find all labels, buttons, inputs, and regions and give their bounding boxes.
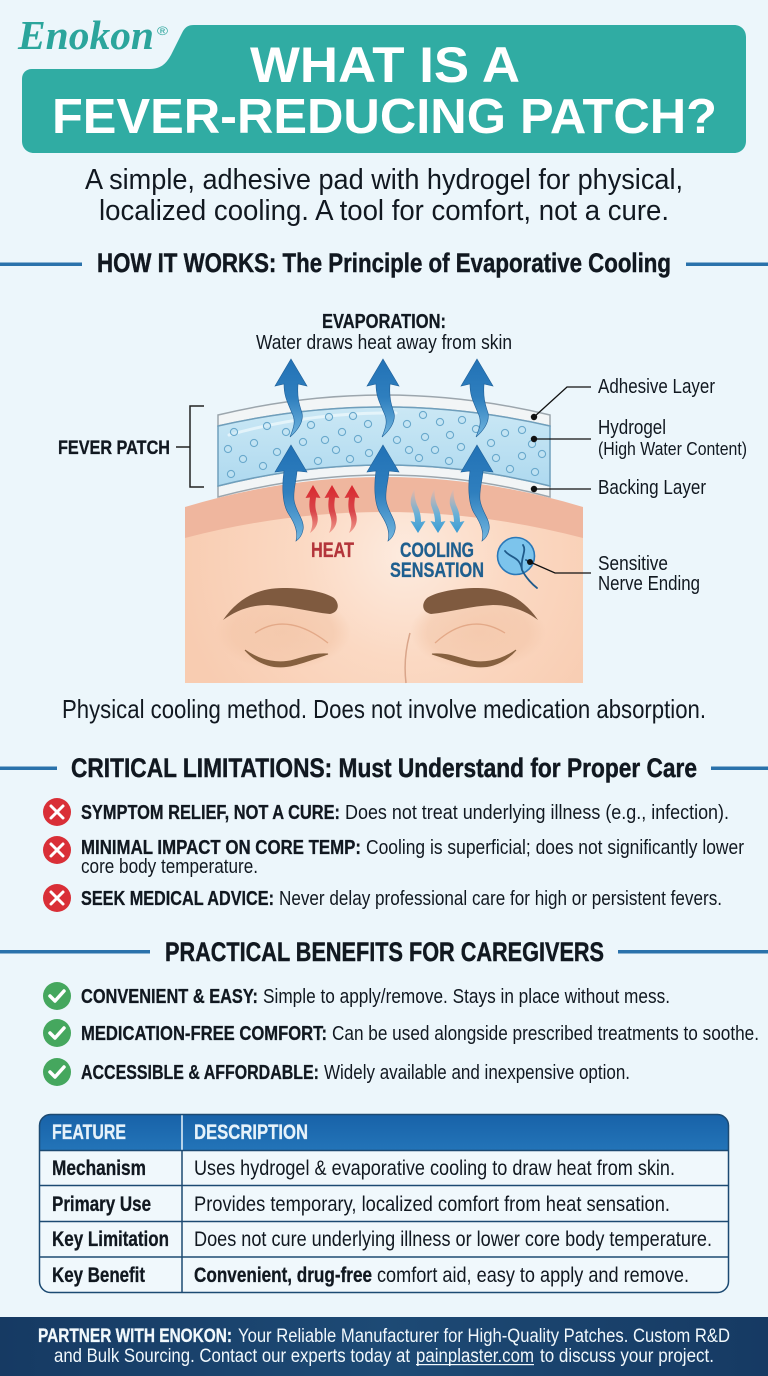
evaporation caption xyxy=(256,310,512,354)
benefits list xyxy=(43,982,759,1086)
row: mechanism: Uses hydrogel & evaporative cooling to draw heat from skin. xyxy=(194,1157,675,1180)
footer call to action: and Bulk Sourcing. Contact our experts today at xyxy=(54,1346,411,1367)
row: primary use: Primary Use xyxy=(52,1193,151,1216)
diagram: patch on forehead xyxy=(185,359,583,683)
row: mechanism: Mechanism xyxy=(52,1157,146,1180)
label: cooling sensation: SENSATION xyxy=(390,559,484,582)
arrows: heat drawn from skin xyxy=(275,445,493,541)
limitation 2: core body temperature. xyxy=(81,856,258,878)
intro text: A simple, adhesive pad with hydrogel for physical, xyxy=(85,164,683,196)
benefit 1: Simple to apply/remove. Stays in place without mess. xyxy=(263,986,670,1008)
row: key limitation: Key Limitation xyxy=(52,1228,169,1251)
icon: nerve ending xyxy=(498,538,537,588)
arrows: evaporation rising from patch xyxy=(275,359,493,437)
row: mechanism xyxy=(52,1157,675,1180)
callout: adhesive layer xyxy=(531,376,715,420)
limitation 1: SYMPTOM RELIEF, NOT A CURE: xyxy=(81,802,340,824)
row: key benefit: Convenient, drug-free xyxy=(194,1264,372,1287)
footer call to action: PARTNER WITH ENOKON: xyxy=(38,1326,232,1347)
benefit 3: Widely available and inexpensive option. xyxy=(324,1062,630,1084)
benefit 1 xyxy=(43,982,670,1010)
limitation 2: MINIMAL IMPACT ON CORE TEMP: xyxy=(81,837,361,859)
label: cooling sensation: COOLING xyxy=(400,539,474,562)
evaporation caption: Water draws heat away from skin xyxy=(256,331,512,354)
title banner: FEVER-REDUCING PATCH? xyxy=(52,90,717,144)
benefit 1: CONVENIENT & EASY: xyxy=(81,986,258,1008)
limitation 1 xyxy=(43,798,729,826)
footer call to action: to discuss your project. xyxy=(540,1346,714,1367)
benefit 3: ACCESSIBLE & AFFORDABLE: xyxy=(81,1062,319,1084)
callout: sensitive nerve ending: Nerve Ending xyxy=(598,573,700,595)
benefit 3 xyxy=(43,1058,630,1086)
patch layers xyxy=(218,395,550,497)
callout: hydrogel: (High Water Content) xyxy=(598,438,747,459)
title banner: WHAT IS A xyxy=(250,37,520,93)
table header: FEATURE xyxy=(52,1121,126,1144)
row: key benefit: comfort aid, easy to apply and remove. xyxy=(377,1264,689,1287)
skin and face xyxy=(185,477,583,683)
table header xyxy=(40,1114,728,1150)
limitation 3 xyxy=(43,884,722,912)
callout: hydrogel: Hydrogel xyxy=(598,417,666,439)
title banner xyxy=(22,25,746,153)
limitation 3: SEEK MEDICAL ADVICE: xyxy=(81,888,274,910)
benefit 2 xyxy=(43,1019,759,1047)
callout: sensitive nerve ending xyxy=(527,553,700,595)
label: heat: HEAT xyxy=(311,539,354,562)
row: key benefit: Key Benefit xyxy=(52,1264,145,1287)
benefit 2: MEDICATION-FREE COMFORT: xyxy=(81,1023,327,1045)
row: primary use: Provides temporary, localized comfort from heat sensation. xyxy=(194,1193,670,1216)
footer call to action: painplaster.com xyxy=(416,1346,534,1367)
callout: sensitive nerve ending: Sensitive xyxy=(598,553,668,575)
callout: backing layer xyxy=(531,477,706,499)
callout: hydrogel xyxy=(531,417,747,459)
logo: ® xyxy=(157,24,168,38)
comparison table xyxy=(40,1114,728,1293)
intro text xyxy=(85,164,683,227)
bracket and label: fever patch xyxy=(58,406,204,487)
label: cooling sensation xyxy=(390,539,484,582)
callout: backing layer: Backing Layer xyxy=(598,477,706,499)
limitations list xyxy=(43,798,744,912)
footer call to action xyxy=(0,1317,768,1376)
arrows: cooling xyxy=(410,488,464,533)
logo: Enokon xyxy=(17,12,154,58)
evaporation caption: EVAPORATION: xyxy=(322,310,446,333)
heading: practical benefits: PRACTICAL BENEFITS FOR CAREGIVERS xyxy=(165,937,604,967)
intro text: localized cooling. A tool for comfort, not a cure. xyxy=(99,195,669,227)
limitation 2 xyxy=(43,836,744,878)
callout: adhesive layer: Adhesive Layer xyxy=(598,376,715,398)
row: primary use xyxy=(52,1193,670,1216)
limitation 1: Does not treat underlying illness (e.g., infection). xyxy=(345,802,729,824)
row: key benefit xyxy=(52,1264,689,1287)
bracket and label: fever patch: FEVER PATCH xyxy=(58,437,170,459)
table header: DESCRIPTION xyxy=(194,1121,308,1144)
arrows: heat xyxy=(306,485,360,533)
